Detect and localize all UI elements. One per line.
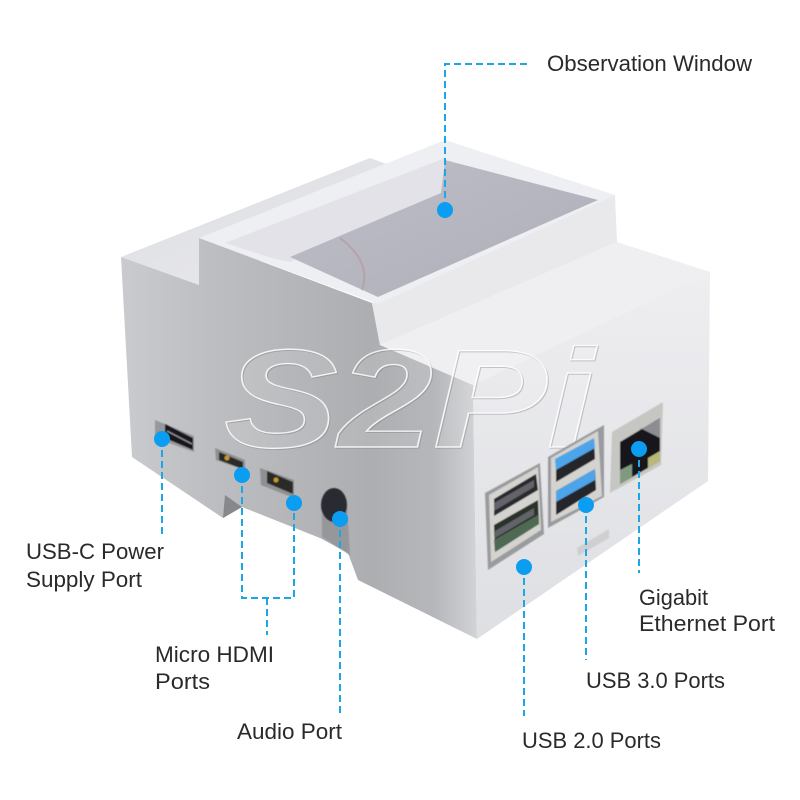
callout: audio <box>237 511 348 744</box>
rear shoulder top <box>121 158 445 285</box>
callout: ethernet <box>631 441 775 636</box>
callout: micro HDMI: Ports <box>155 669 210 694</box>
port: micro HDMI 1 <box>215 448 245 470</box>
tall front face <box>372 195 617 345</box>
right light face <box>473 272 710 639</box>
port: USB 3.0 <box>548 425 604 528</box>
callout: observation window <box>437 51 752 218</box>
base notch <box>223 495 242 518</box>
callout: USB-C power <box>26 431 170 592</box>
observation window lid <box>199 140 615 304</box>
right shoulder top <box>380 242 710 385</box>
callout: USB-C power: Supply Port <box>26 567 142 592</box>
callout: micro HDMI <box>155 467 302 694</box>
lid rim <box>199 140 615 304</box>
callout: ethernet: Ethernet Port <box>639 611 775 636</box>
callout: USB 3.0 <box>578 497 725 693</box>
internal wire <box>340 238 364 290</box>
callout: USB-C power: USB-C Power <box>26 539 164 564</box>
left grey face <box>121 238 477 639</box>
port: audio jack <box>321 488 350 555</box>
callout: observation window: Observation Window <box>547 51 752 76</box>
callout: ethernet: Gigabit <box>639 585 708 610</box>
callout: USB 3.0: USB 3.0 Ports <box>586 668 725 693</box>
port: USB-C <box>155 420 194 452</box>
watermark logo: S2Pi <box>224 321 598 477</box>
inner wall <box>225 158 445 262</box>
port: micro HDMI 2 <box>260 468 294 498</box>
callout: micro HDMI: Micro HDMI <box>155 642 274 667</box>
enclosure body <box>121 158 710 639</box>
slot below USB ports <box>577 529 609 556</box>
callout: audio: Audio Port <box>237 719 342 744</box>
port: USB 2.0 <box>485 463 544 570</box>
watermark logo: S2Pi <box>225 322 599 478</box>
port: gigabit ethernet <box>610 402 663 493</box>
callout: USB 2.0 <box>516 559 661 753</box>
callout: USB 2.0: USB 2.0 Ports <box>522 728 661 753</box>
window floor <box>290 160 598 297</box>
